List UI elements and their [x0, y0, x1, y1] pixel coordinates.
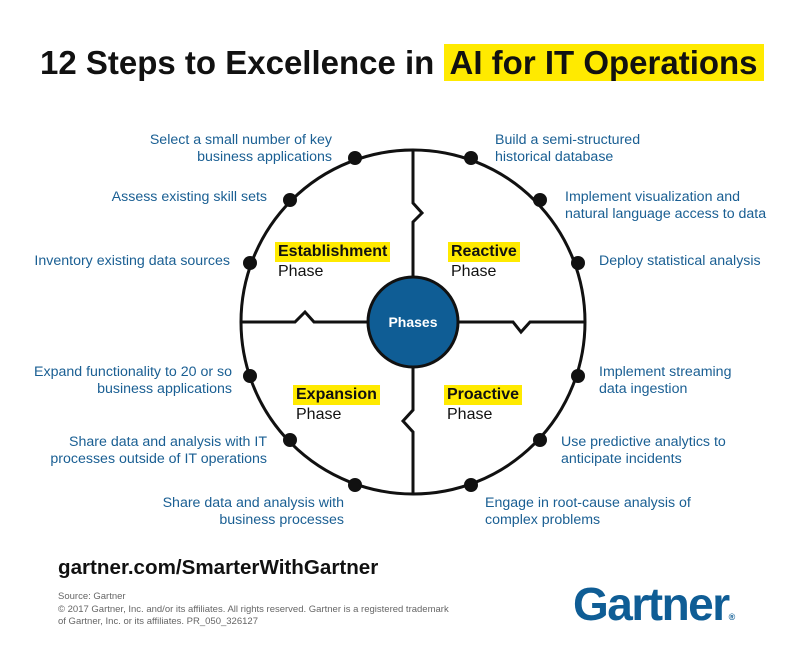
- phase labels: [275, 242, 390, 280]
- text: Deploy statistical analysis: [599, 253, 761, 269]
- text: Proactive: [447, 386, 519, 403]
- text: Implement streaming: [599, 364, 731, 380]
- center circle: Phases: [388, 314, 438, 330]
- text: Assess existing skill sets: [112, 189, 267, 205]
- right steps: [495, 132, 640, 165]
- text: Expansion: [296, 386, 377, 403]
- source: of Gartner, Inc. or its affiliates. PR_050_326127: [58, 616, 258, 627]
- text: Engage in root-cause analysis of: [485, 495, 691, 511]
- text: Expand functionality to 20 or so: [34, 364, 232, 380]
- text: anticipate incidents: [561, 451, 682, 467]
- text: Phase: [447, 406, 492, 423]
- right steps: Build a semi-structured: [495, 132, 640, 148]
- logo: Gartner®: [573, 578, 734, 630]
- phase labels: Establishment: [278, 243, 387, 260]
- text: Phase: [451, 263, 496, 280]
- text: processes outside of IT operations: [50, 451, 267, 467]
- text: business applications: [97, 381, 232, 397]
- source: [58, 591, 449, 627]
- source: © 2017 Gartner, Inc. and/or its affiliates. All rights reserved. Gartner is a registered trademark: [58, 604, 449, 614]
- left steps: Select a small number of key: [150, 132, 332, 148]
- text: natural language access to data: [565, 206, 766, 222]
- dots: [243, 151, 585, 492]
- text: data ingestion: [599, 381, 687, 397]
- text: Share data and analysis with: [163, 495, 344, 511]
- source: Source: Gartner: [58, 591, 126, 602]
- text: Phase: [296, 406, 341, 423]
- phase labels: Phase: [278, 263, 323, 280]
- url: gartner.com/SmarterWithGartner: [58, 556, 378, 579]
- text: Share data and analysis with IT: [69, 434, 267, 450]
- center circle: [368, 277, 458, 367]
- text: Use predictive analytics to: [561, 434, 726, 450]
- left steps: [150, 132, 332, 165]
- text: complex problems: [485, 512, 600, 528]
- title: 12 Steps to Excellence in AI for IT Operations: [40, 44, 758, 81]
- text: business processes: [219, 512, 344, 528]
- text: Implement visualization and: [565, 189, 740, 205]
- left steps: business applications: [197, 149, 332, 165]
- text: Reactive: [451, 243, 517, 260]
- right steps: historical database: [495, 149, 613, 165]
- text: Inventory existing data sources: [34, 253, 230, 269]
